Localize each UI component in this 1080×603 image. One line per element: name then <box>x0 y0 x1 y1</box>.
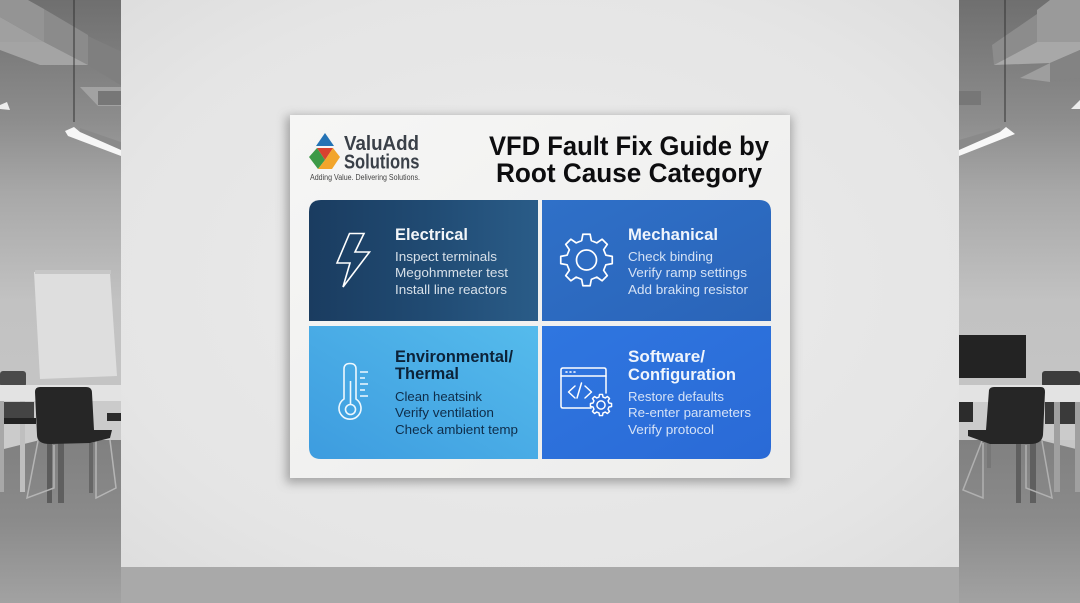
fixes: environmental thermal: Check ambient temp <box>395 422 518 437</box>
panel: electrical <box>309 200 538 321</box>
heading: software configuration: Software/ <box>628 347 705 366</box>
heading: mechanical: Mechanical <box>628 225 718 244</box>
floor strip under wall <box>121 567 959 603</box>
heading: software configuration: Configuration <box>628 365 736 384</box>
heading: electrical: Electrical <box>395 225 468 244</box>
icon: logo mark <box>309 133 340 169</box>
fixes: mechanical: Add braking resistor <box>628 282 749 297</box>
logo wordmark: ValuAdd <box>344 133 419 155</box>
title: Root Cause Category <box>496 158 762 188</box>
heading: environmental thermal <box>395 347 513 383</box>
icon: code window with gear <box>561 368 612 416</box>
panel: mechanical <box>542 200 771 321</box>
fixes: mechanical <box>628 249 749 297</box>
logo <box>309 133 420 182</box>
fixes: software configuration: Re-enter parameters <box>628 405 751 420</box>
fixes: software configuration: Restore defaults <box>628 389 724 404</box>
fixes: electrical: Install line reactors <box>395 282 508 297</box>
logo wordmark second line: Solutions <box>344 152 420 174</box>
fixes: environmental thermal: Verify ventilation <box>395 405 494 420</box>
panel: software configuration <box>542 326 771 459</box>
poster shadow <box>286 116 792 483</box>
fixes: environmental thermal <box>395 389 518 437</box>
panel: environmental thermal <box>309 326 538 459</box>
logo tagline: Adding Value. Delivering Solutions. <box>310 173 420 182</box>
title <box>489 131 769 188</box>
heading: environmental thermal: Environmental/ <box>395 347 513 366</box>
icon: gear <box>561 234 612 286</box>
heading: software configuration <box>628 347 736 384</box>
title: VFD Fault Fix Guide by <box>489 131 769 161</box>
fixes: mechanical: Check binding <box>628 249 713 264</box>
fixes: software configuration: Verify protocol <box>628 422 714 437</box>
fixes: software configuration <box>628 389 751 437</box>
fixes: environmental thermal: Clean heatsink <box>395 389 483 404</box>
icon: lightning bolt <box>337 234 370 287</box>
icon: thermometer <box>339 364 368 419</box>
feature wall <box>121 0 959 567</box>
fixes: electrical: Megohmmeter test <box>395 265 508 280</box>
right office background <box>958 0 1080 603</box>
left office background <box>0 0 122 603</box>
fixes: electrical <box>395 249 508 297</box>
fixes: electrical: Inspect terminals <box>395 249 498 264</box>
poster panel <box>290 115 790 478</box>
heading: environmental thermal: Thermal <box>395 364 459 383</box>
fixes: mechanical: Verify ramp settings <box>628 265 748 280</box>
